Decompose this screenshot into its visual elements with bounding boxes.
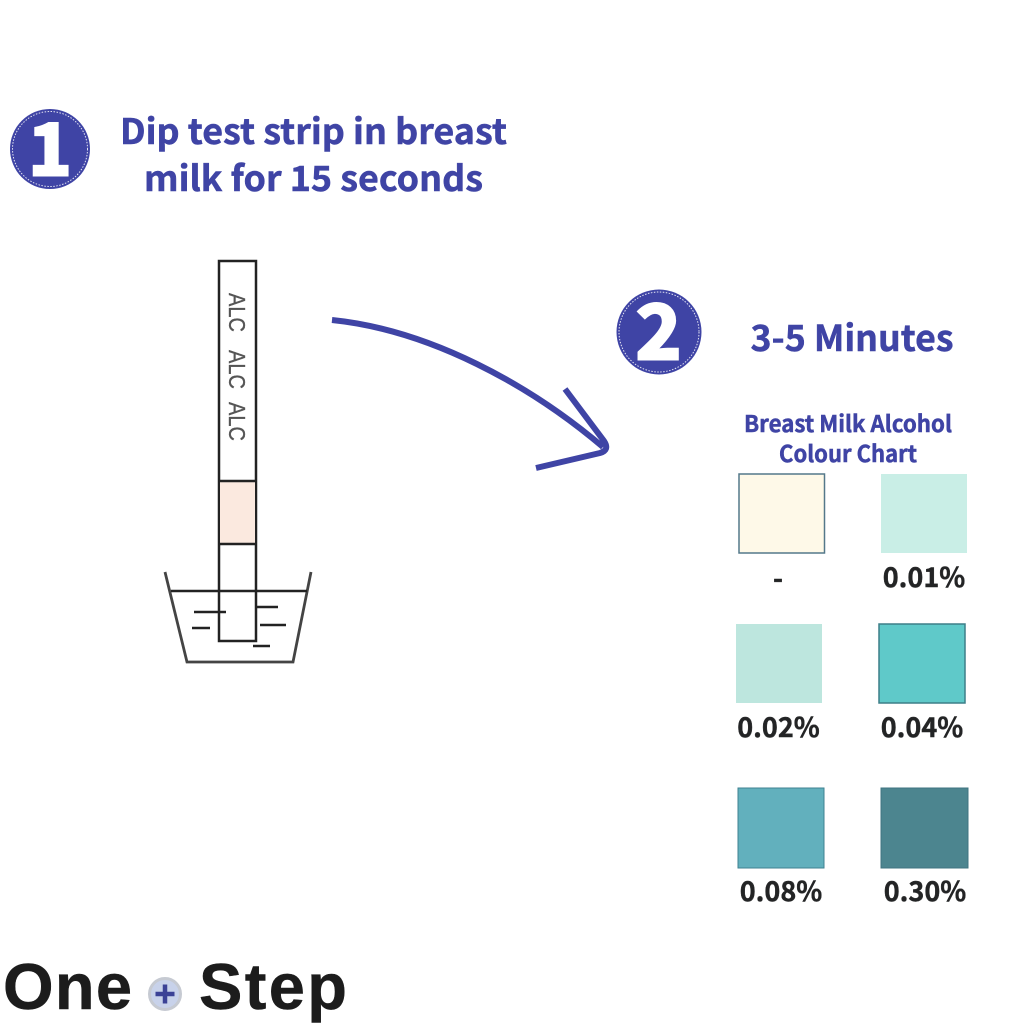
step 1 heading xyxy=(120,104,507,202)
swatch: 0.04%: 0.04% xyxy=(881,706,963,745)
swatch: 0.08%: 0.08% xyxy=(740,870,822,909)
step 2 heading: 3-5 Minutes xyxy=(750,310,954,362)
logo: One + Step: Step xyxy=(199,950,347,1023)
colour chart title xyxy=(744,405,952,469)
swatch: 0.02%: 0.02% xyxy=(737,706,820,745)
logo: One + Step: One xyxy=(3,950,132,1023)
swatch: 0.08% xyxy=(738,788,824,909)
step 1 heading: milk for 15 seconds xyxy=(144,151,483,202)
swatch: 0.30%: 0.30% xyxy=(884,870,966,909)
arrow from step 1 to step 2 xyxy=(332,320,606,468)
step 1 badge xyxy=(10,91,90,198)
swatch: 0.02% xyxy=(736,624,822,745)
step 1 badge: 1 xyxy=(27,91,73,198)
colour chart title: Breast Milk Alcohol xyxy=(744,405,952,439)
strip: ALC xyxy=(224,350,250,389)
strip: ALC xyxy=(224,402,250,441)
step 2 badge: 2 xyxy=(635,271,682,383)
strip: ALC xyxy=(224,293,250,332)
strip xyxy=(219,261,256,641)
swatch: negative xyxy=(739,474,824,596)
swatch: 0.01% xyxy=(881,474,967,595)
colour chart xyxy=(736,474,968,909)
plus icon xyxy=(150,978,180,1010)
swatch: 0.01%: 0.01% xyxy=(883,556,965,595)
swatch: 0.04% xyxy=(879,624,965,745)
swatch: negative: - xyxy=(773,557,783,596)
step 1 heading: Dip test strip in breast xyxy=(120,104,507,155)
cup xyxy=(165,572,311,662)
colour chart title: Colour Chart xyxy=(779,435,917,469)
step 2 badge xyxy=(616,271,702,383)
logo: One + Step xyxy=(3,950,347,1023)
test strip dipped in milk cup xyxy=(165,261,311,662)
swatch: 0.30% xyxy=(881,788,968,909)
